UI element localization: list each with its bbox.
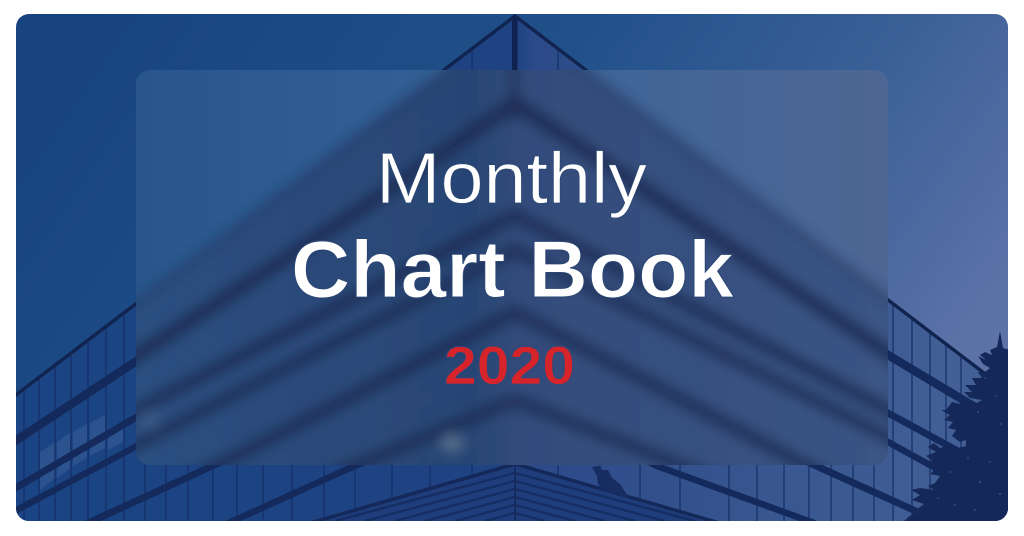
blurred reflection spots bbox=[441, 435, 463, 451]
blurred facade bbox=[136, 70, 888, 465]
year: 2020: 2020 bbox=[444, 336, 575, 396]
frosted glass panel bbox=[136, 70, 888, 465]
window reflections bbox=[40, 415, 123, 490]
fir tree bbox=[904, 331, 1010, 530]
blurred building bbox=[136, 70, 888, 465]
panel base colour bbox=[136, 70, 888, 306]
blurred floor bands bbox=[136, 96, 888, 465]
floor bands bbox=[16, 350, 1008, 521]
tree silhouette bbox=[904, 331, 1010, 530]
lower roof bbox=[354, 468, 706, 521]
title: Chart Book: Chart Book bbox=[291, 225, 735, 315]
title: Monthly: Monthly bbox=[376, 139, 647, 219]
blurred roof edge bbox=[136, 70, 888, 310]
blurred corner post bbox=[508, 70, 520, 94]
corner seam of lower roof bbox=[514, 466, 516, 521]
tree speckles bbox=[937, 377, 1002, 511]
central corner post bbox=[512, 18, 518, 70]
roof line bbox=[0, 16, 1024, 408]
lower roof stripes bbox=[335, 473, 695, 521]
lower roof edge bbox=[312, 465, 718, 521]
small distant tree bbox=[592, 466, 627, 496]
